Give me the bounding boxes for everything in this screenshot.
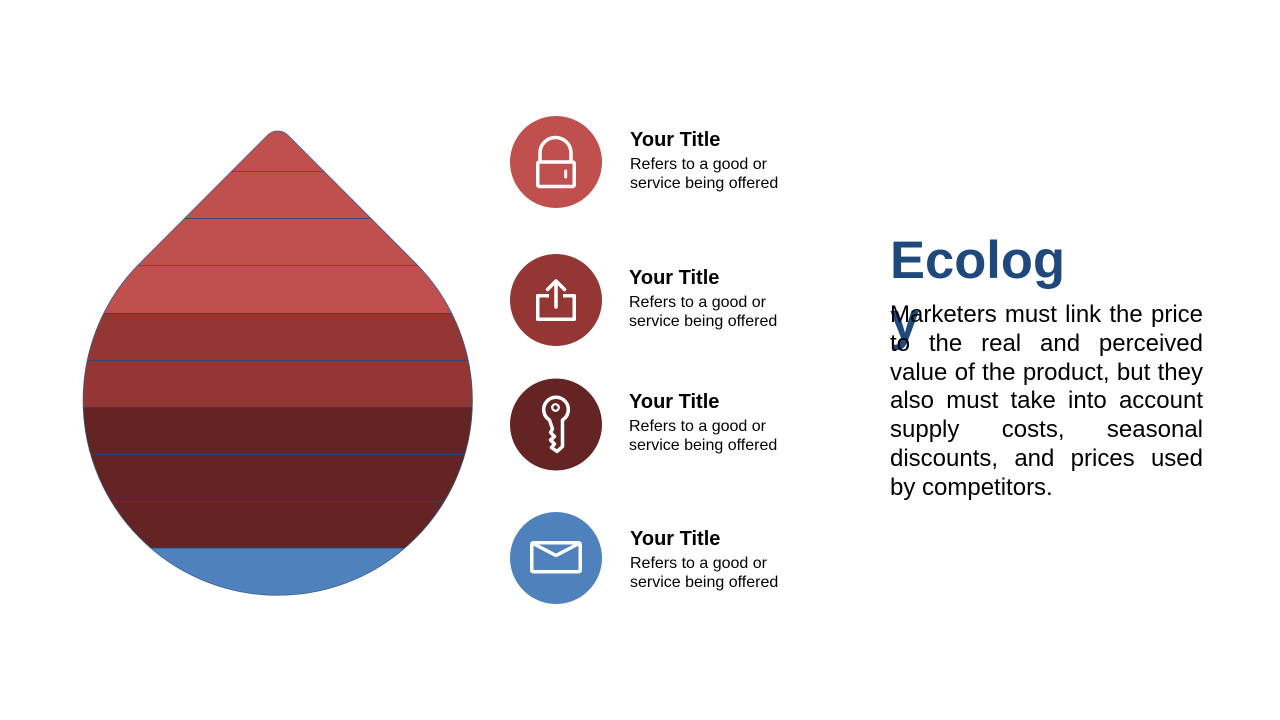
icon: key in maroon circle bbox=[510, 378, 602, 470]
title: item 2: Your Title bbox=[629, 267, 719, 289]
title: item 3: Your Title bbox=[629, 391, 719, 413]
band group: mid red bbox=[70, 314, 490, 407]
icon: share in dark red circle bbox=[510, 254, 602, 346]
icon: envelope in blue circle bbox=[510, 512, 602, 604]
description: item 2: service being offered bbox=[629, 313, 777, 330]
description: item 3: Refers to a good or bbox=[629, 418, 766, 435]
band group: light red top bbox=[104, 131, 452, 314]
description: item 4 bbox=[630, 555, 778, 591]
heading: Ecology: y bbox=[890, 292, 919, 351]
body text: Marketers must link the price bbox=[890, 301, 1203, 328]
body text: supply costs, seasonal bbox=[890, 416, 1203, 443]
water drop diagram bbox=[82, 130, 473, 596]
description: item 3: service being offered bbox=[629, 437, 777, 454]
description: item 1 bbox=[630, 156, 778, 192]
description: item 1: Refers to a good or bbox=[630, 156, 767, 173]
description: item 1: service being offered bbox=[630, 175, 778, 192]
title: item 4: Your Title bbox=[630, 528, 720, 550]
icon: lock in red circle bbox=[510, 116, 602, 208]
body text: also must take into account bbox=[890, 387, 1203, 414]
description: item 2 bbox=[629, 294, 777, 330]
description: item 4: Refers to a good or bbox=[630, 555, 767, 572]
title: item 1: Your Title bbox=[630, 129, 720, 151]
body text: value of the product, but they bbox=[890, 359, 1203, 386]
band group: dark red bbox=[70, 407, 490, 548]
band: blue bottom bbox=[152, 548, 404, 596]
description: item 2: Refers to a good or bbox=[629, 294, 766, 311]
heading: Ecology bbox=[890, 231, 1065, 351]
heading: Ecology: Ecolog bbox=[890, 231, 1065, 290]
body text: discounts, and prices used bbox=[890, 445, 1203, 472]
body text: to the real and perceived bbox=[890, 330, 1203, 357]
description: item 4: service being offered bbox=[630, 574, 778, 591]
body text: by competitors. bbox=[890, 474, 1053, 501]
water drop outline bbox=[83, 131, 472, 595]
description: item 3 bbox=[629, 418, 777, 454]
body text bbox=[890, 301, 1203, 501]
